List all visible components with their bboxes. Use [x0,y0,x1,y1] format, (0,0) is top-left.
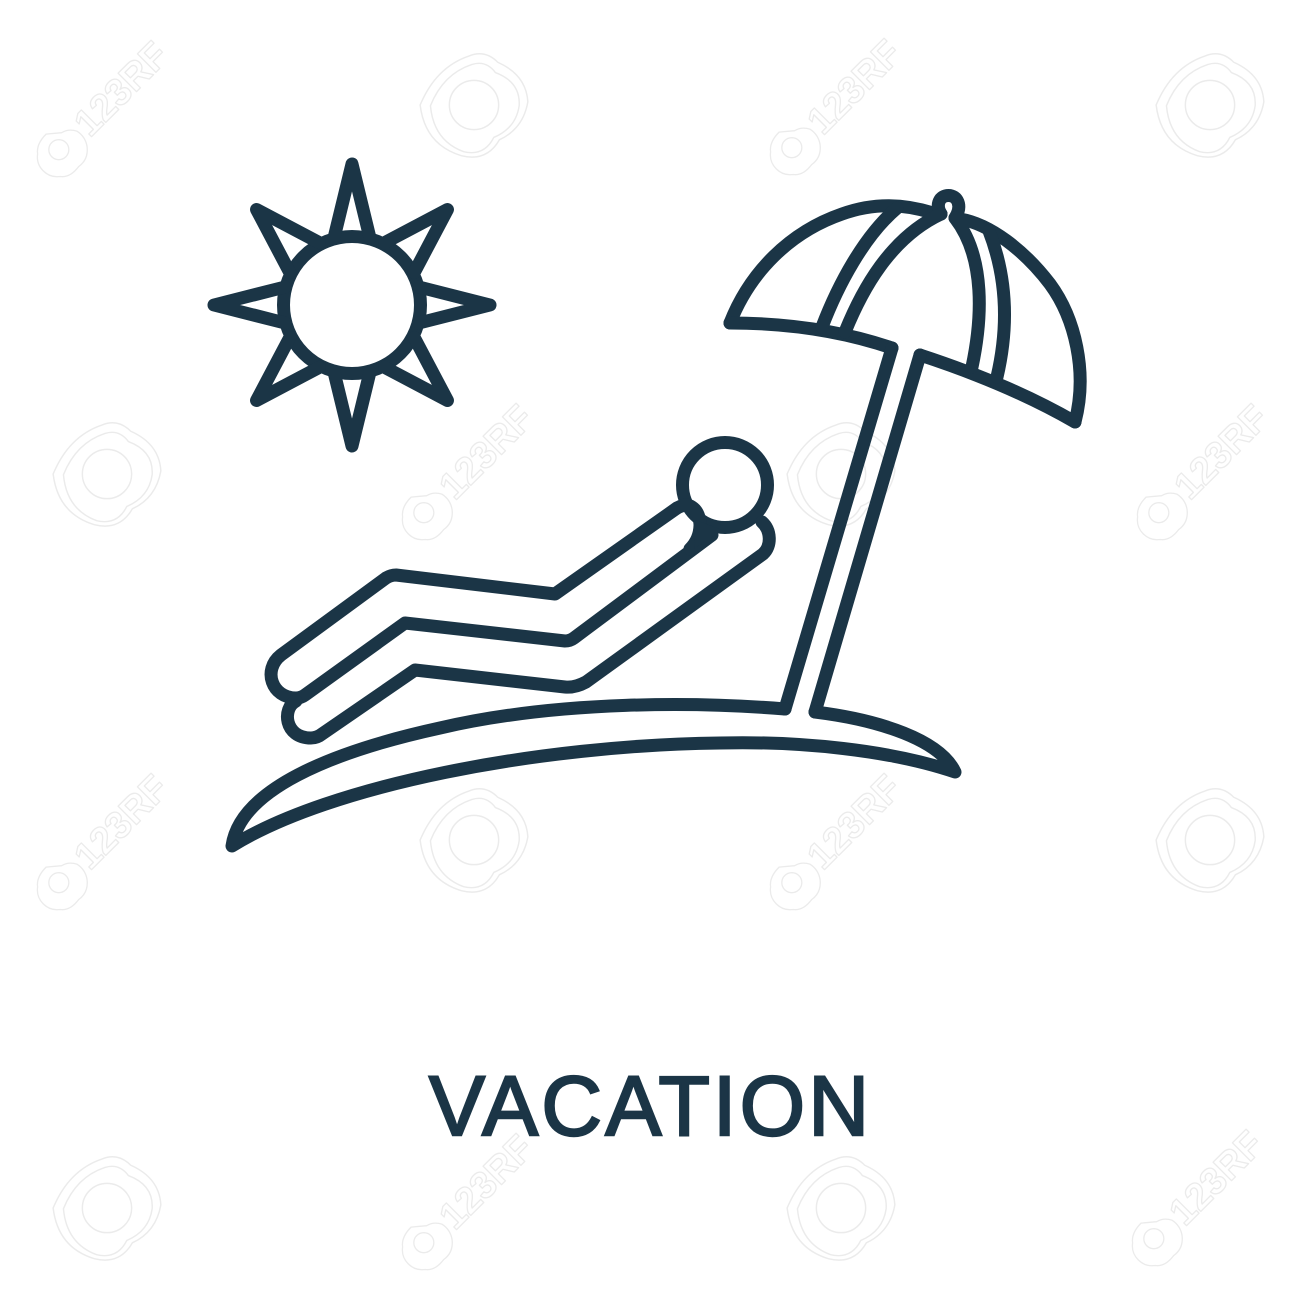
title: VACATION [429,1059,869,1153]
lower limb [287,522,769,738]
umbrella pole [785,348,920,712]
watermark pattern: 123RF [1162,1123,1272,1234]
icon: sun [214,164,490,446]
sand mound [232,705,955,846]
umbrella canopy left [730,206,941,323]
canopy arc right [960,219,1080,422]
watermark pattern: 123RF [432,397,542,508]
icon: vacation scene [214,164,1080,846]
shoulder wedge [694,520,722,549]
umbrella ribs [822,208,1004,377]
arm end at head [677,505,700,549]
head [682,442,768,528]
icon: beach umbrella [730,196,1080,712]
watermark pattern: 123RF [800,767,910,878]
watermark pattern: 123RF [67,767,177,878]
icon: reclining person [271,442,769,738]
watermark pattern: 123RF [67,34,177,145]
canopy lower edge left [730,323,892,348]
umbrella finial [938,196,959,218]
canopy lower edge right [920,355,1075,422]
watermark pattern: 123RF [432,1127,542,1238]
sun rays [214,164,490,446]
watermark pattern: 123RF [1167,397,1277,508]
sun disc [284,236,420,374]
watermark pattern: 123RF [800,32,910,143]
upper limb [271,508,712,698]
